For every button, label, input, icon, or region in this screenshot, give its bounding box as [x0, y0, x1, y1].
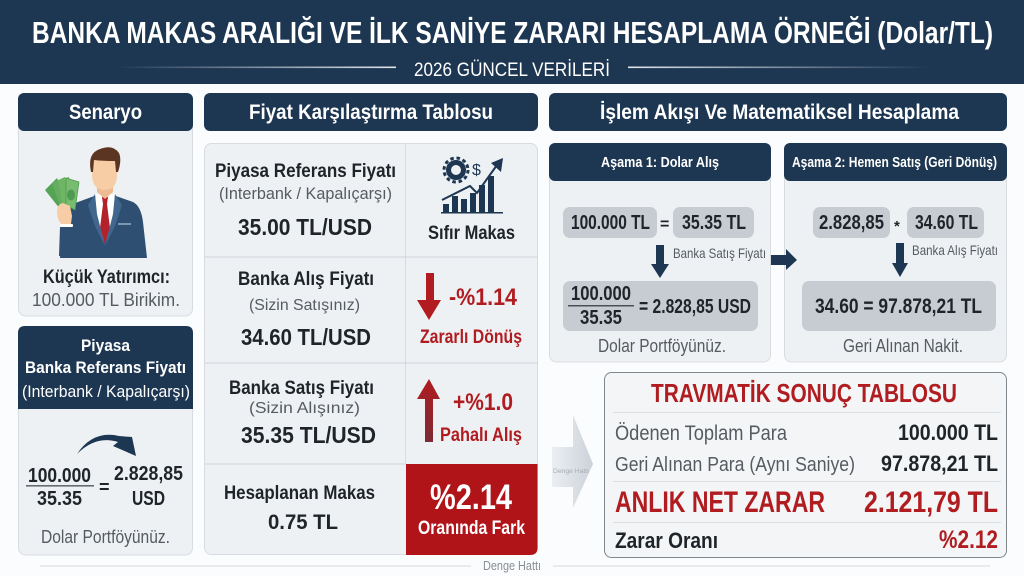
heading: stage 1: Aşama 1: Dolar Alış: [601, 154, 719, 171]
row: loss rate: [615, 526, 998, 554]
formula: =: [99, 477, 110, 497]
equation boxes: [813, 207, 984, 238]
equation boxes: 34.60 TL: [915, 212, 978, 234]
row: bank buy: 34.60 TL/USD: [241, 324, 371, 350]
row: bank sell: [229, 378, 376, 448]
row: bank buy: [238, 269, 374, 350]
row: bank sell: (Sizin Alışınız): [249, 400, 360, 417]
row: money received: Geri Alınan Para (Aynı Saniye): [615, 454, 855, 476]
result box: 35.35: [580, 307, 622, 329]
label: loss: -%1.14: [449, 284, 518, 311]
heading: senaryo: Senaryo: [69, 101, 142, 124]
result box: = 2.828,85 USD: [639, 296, 751, 318]
result box: 100.000: [571, 283, 631, 305]
heading: fiyat karşılaştırma: Fiyat Karşılaştırma Tablosu: [249, 101, 493, 124]
formula: 35.35: [37, 488, 82, 510]
row: bank sell: Banka Satış Fiyatı: [229, 378, 374, 399]
equation boxes: [563, 207, 754, 238]
arrow: stage 1 to stage 2: [771, 249, 797, 270]
label: loss: Zararlı Dönüş: [420, 327, 522, 348]
row: money received: 97.878,21 TL: [881, 451, 998, 476]
heading: piyasa: (Interbank / Kapalıçarşı): [22, 382, 190, 401]
icon: gear and growth chart: [441, 158, 503, 214]
row: market reference: 35.00 TL/USD: [238, 214, 372, 240]
row: bank sell: 35.35 TL/USD: [241, 422, 376, 448]
icon: red up arrow: [417, 379, 440, 442]
heading: result: TRAVMATİK SONUÇ TABLOSU: [651, 378, 957, 408]
label: bank buy price: Banka Alış Fiyatı: [912, 242, 998, 258]
equation boxes: 35.35 TL: [682, 212, 746, 234]
formula: 100.000: [28, 465, 91, 487]
callout: 2.14 percent: %2.14: [430, 478, 512, 517]
heading: piyasa: Banka Referans Fiyatı: [25, 358, 186, 377]
label: expensive buy: Pahalı Alış: [440, 425, 522, 446]
row: market reference: [215, 161, 396, 240]
callout: 2.14 percent: [406, 464, 538, 555]
heading: fiyat karşılaştırma: [204, 93, 538, 131]
row: calculated spread: 0.75 TL: [268, 511, 338, 534]
arrow: down: [892, 243, 908, 277]
panel: result table: [604, 372, 1006, 558]
row: net loss: 2.121,79 TL: [864, 486, 998, 519]
equation boxes: 2.828,85: [819, 212, 884, 234]
panel: senaryo: [18, 93, 193, 316]
label: expensive buy: +%1.0: [453, 389, 513, 416]
icon: gear and growth chart: $: [472, 162, 481, 179]
label: bank sell price: Banka Satış Fiyatı: [673, 245, 766, 261]
icon: red down arrow: [417, 273, 441, 320]
row: bank buy: (Sizin Satışınız): [249, 297, 360, 314]
panel: stage 2: [784, 143, 1007, 362]
text: small investor: [32, 267, 180, 310]
caption: Geri Alınan Nakit.: [843, 336, 963, 356]
row: bank buy: Banka Alış Fiyatı: [238, 269, 374, 290]
header banner: [0, 0, 1024, 84]
heading: işlem akışı: [549, 93, 1007, 131]
callout: 2.14 percent: Oranında Fark: [418, 518, 525, 539]
heading: piyasa: Piyasa: [81, 336, 130, 355]
row: total paid: [615, 420, 998, 445]
row: loss rate: %2.12: [939, 526, 998, 554]
row: market reference: (Interbank / Kapalıçarşı): [219, 184, 392, 203]
formula: [26, 463, 183, 510]
equation boxes: 100.000 TL: [571, 212, 650, 234]
formula: USD: [132, 488, 165, 510]
arrow: down: [651, 245, 669, 278]
icon: investor holding money: [45, 147, 147, 258]
row: calculated spread: [224, 483, 375, 534]
row: calculated spread: Hesaplanan Makas: [224, 483, 375, 504]
caption: Dolar Portföyünüz.: [598, 336, 726, 356]
panel: price table: [204, 144, 538, 555]
equation boxes: *: [894, 218, 900, 235]
row: money received: [615, 451, 998, 476]
arrow: balance line to results: Denge Hattı: [553, 469, 589, 475]
label: zero spread: Sıfır Makas: [428, 223, 515, 244]
result box: [563, 281, 758, 331]
equation boxes: =: [660, 216, 669, 233]
label: loss: [420, 284, 522, 348]
caption: Dolar Portföyünüz.: [41, 527, 170, 547]
panel: piyasa: [18, 326, 193, 555]
row: market reference: Piyasa Referans Fiyatı: [215, 161, 396, 182]
panel: stage 1: [549, 143, 771, 362]
result box: 34.60 = 97.878,21 TL: [815, 295, 982, 318]
result box: [802, 281, 996, 331]
formula: 2.828,85: [114, 463, 183, 485]
row: loss rate: Zarar Oranı: [615, 528, 718, 553]
icon: curved arrow: [77, 435, 136, 456]
row: total paid: 100.000 TL: [898, 420, 998, 445]
footer: balance line: Denge Hattı: [483, 558, 541, 573]
arrow: balance line to results: [552, 415, 593, 508]
subtitle: 2026 GÜNCEL VERİLERİ: [414, 60, 610, 81]
label: expensive buy: [440, 389, 522, 446]
heading: işlem akışı: İşlem Akışı Ve Matematiksel Hesaplama: [600, 101, 959, 124]
text: small investor: Küçük Yatırımcı:: [43, 267, 170, 288]
row: total paid: Ödenen Toplam Para: [615, 422, 787, 445]
row: net loss: ANLIK NET ZARAR: [615, 486, 825, 519]
heading: piyasa: [22, 336, 190, 401]
text: small investor: 100.000 TL Birikim.: [32, 290, 180, 310]
